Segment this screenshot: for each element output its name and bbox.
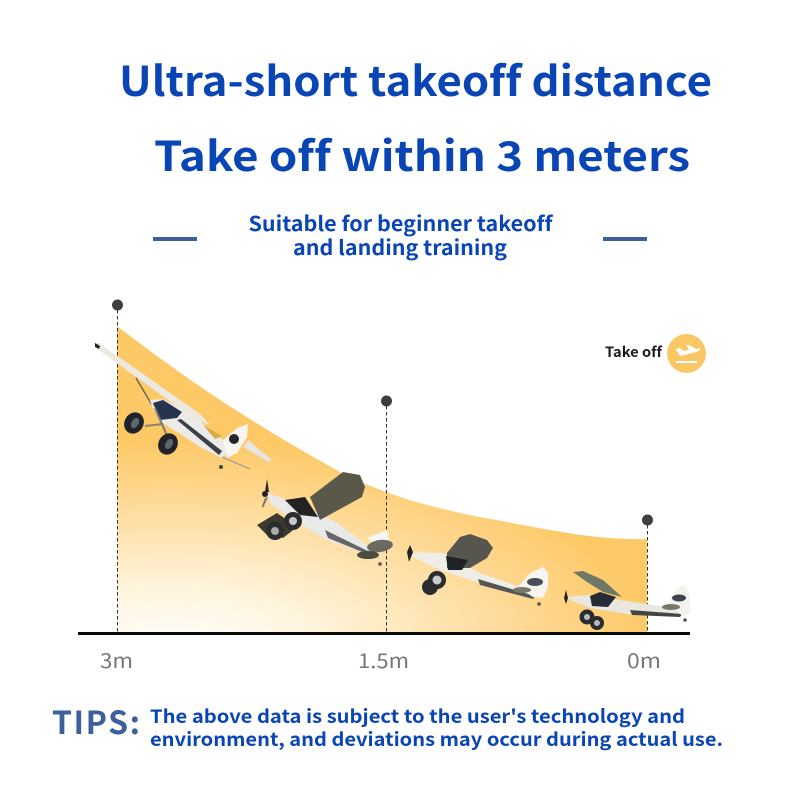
distance marker: 0m: [642, 514, 653, 632]
axis labels: [100, 644, 661, 674]
tips text: environment, and deviations may occur during actual use.: [150, 726, 723, 752]
distance marker: 3m: [112, 300, 123, 632]
subtitle side bars: [153, 237, 647, 241]
title: [119, 48, 712, 183]
subtitle: [248, 207, 554, 261]
title: Take off within 3 meters: [154, 123, 690, 183]
plane 3: accelerating: [407, 534, 548, 606]
axis labels: 3m: [100, 644, 133, 674]
tips text: [150, 703, 723, 752]
plane 4: on the ground: [564, 571, 690, 630]
ground line: [78, 632, 690, 635]
subtitle: Suitable for beginner takeoff: [248, 207, 554, 237]
title: Ultra-short takeoff distance: [119, 48, 712, 108]
take off badge: Take off: [605, 342, 663, 362]
tips text: The above data is subject to the user's technology and: [150, 703, 685, 729]
axis labels: 1.5m: [358, 644, 409, 674]
plane 2: lifting off: [257, 472, 394, 566]
subtitle: and landing training: [293, 231, 507, 261]
distance marker: 1.5m: [381, 396, 392, 632]
takeoff curve area: [117, 326, 647, 633]
icon: departing plane: [667, 334, 706, 373]
take off badge: [605, 334, 706, 373]
tips label: TIPS:: [52, 698, 140, 744]
axis labels: 0m: [627, 644, 661, 674]
plane 1: climbing: [95, 343, 272, 469]
